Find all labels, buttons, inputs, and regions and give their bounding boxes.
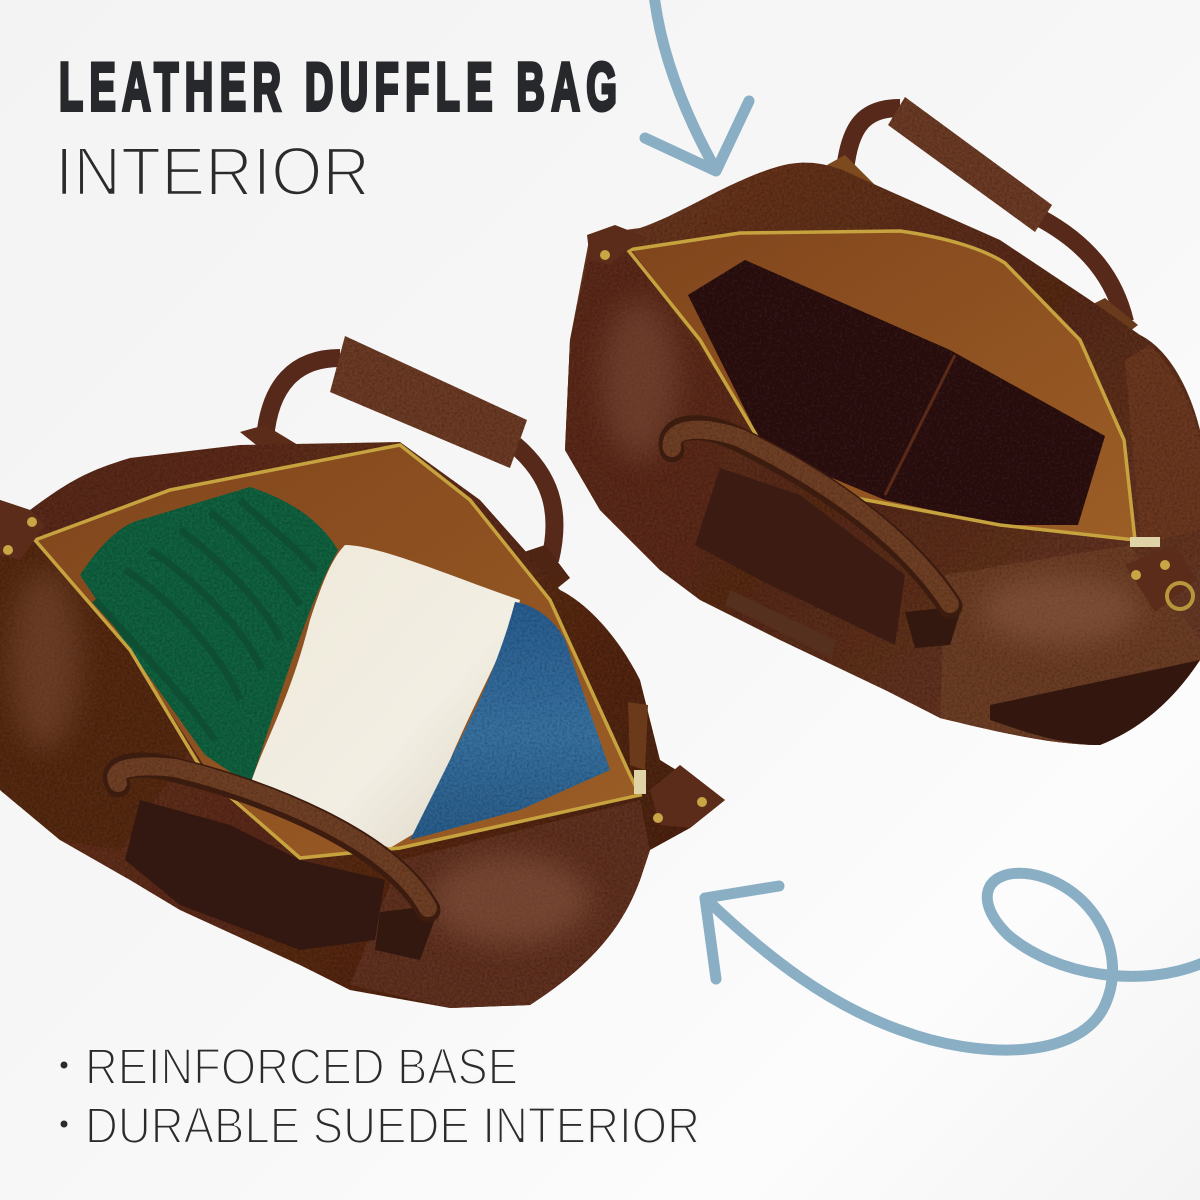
product photo: empty bag [565,97,1200,745]
handle base patch [905,606,962,648]
label patch [725,590,835,658]
front right highlight [430,855,590,945]
interior floor [688,260,1105,525]
front pocket panel [695,468,905,645]
green sweater [80,487,338,785]
suede interior [35,445,640,858]
leather highlight left [602,300,678,460]
white sweater [250,545,520,848]
front right panel [350,800,650,1008]
suede interior wall [630,232,1135,540]
heading: interior: INTERIOR [55,133,370,210]
floor seam [885,355,955,495]
arrow: bottom looping to packed bag [705,873,1200,1050]
right side wall [1125,345,1200,540]
strap tab with rivets [587,225,648,265]
bullet: durable suede interior: DURABLE SUEDE INTERIOR [85,1097,700,1154]
bag body [0,442,725,1008]
heading: leather duffle bag: LEATHER DUFFLE BAG [59,49,617,125]
arrow: top pointing to empty bag [645,0,749,171]
right end lower shadow [990,660,1200,745]
title [55,49,617,210]
zip pull and ring [1125,537,1197,612]
zipper [35,445,640,858]
right end panel [940,545,1200,745]
blue sweater [410,602,610,840]
back handle [827,97,1138,335]
feature list [60,1038,700,1154]
back handle [240,336,570,590]
handle base patch [375,905,440,960]
knit cable lines [95,500,315,740]
front handle [115,765,428,910]
zip pull tab with rivets [628,702,725,828]
front handle [671,428,950,606]
left side panel [565,250,735,590]
product photo: packed bag [0,336,725,1008]
right end highlight [980,575,1140,645]
leather highlight left [10,570,80,750]
bullet: reinforced base: REINFORCED BASE [85,1038,518,1095]
zipper [628,231,1135,540]
left side panel [0,530,190,850]
strap tab with rivet [0,500,45,560]
bag body [565,163,1200,745]
front pocket panel [125,800,385,950]
